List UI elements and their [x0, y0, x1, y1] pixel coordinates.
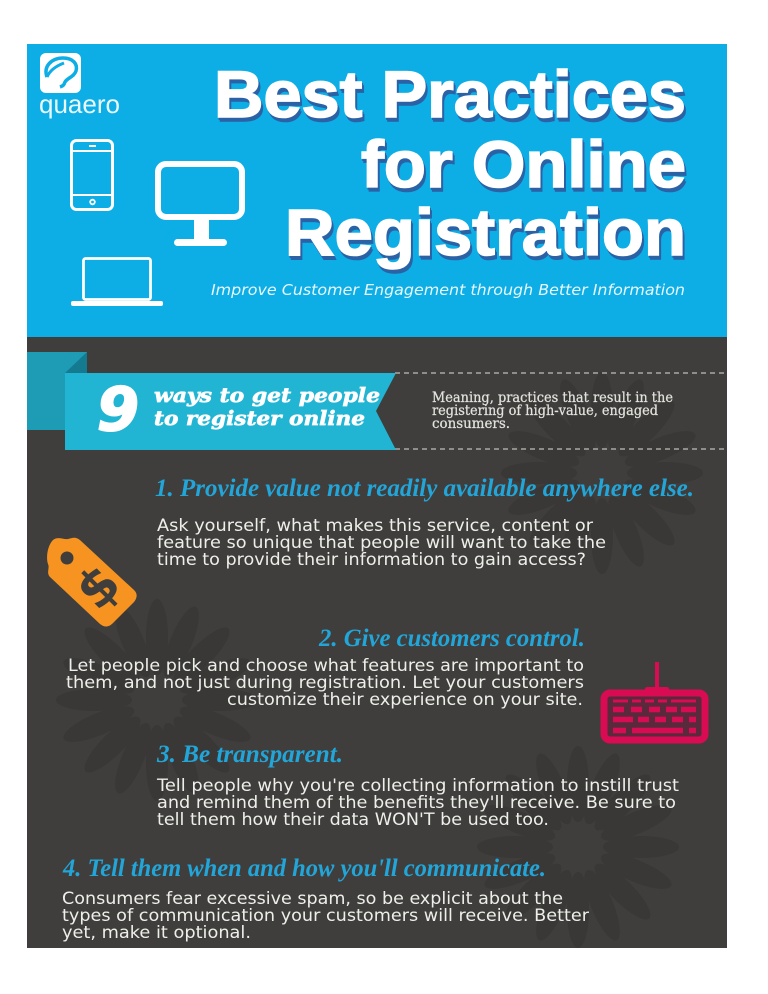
section 3: and remind them of the benefits they'll receive. Be sure to — [157, 793, 676, 812]
section 3: Tell people why you're collecting information to instill trust — [156, 776, 680, 795]
section 1 — [155, 475, 694, 569]
logo: quaero: quaero — [39, 89, 120, 119]
title: Registration — [285, 195, 686, 269]
section 4: 4. Tell them when and how you'll communicate. — [62, 855, 546, 882]
icon: desktop monitor — [158, 164, 242, 246]
dashed rules — [395, 373, 727, 449]
text: banner description: Meaning, practices that result in the — [432, 390, 673, 406]
section 2: Let people pick and choose what features are important to — [68, 656, 584, 675]
logo: quaero — [39, 53, 120, 119]
section 4: Consumers fear excessive spam, so be explicit about the — [62, 889, 563, 908]
text: banner description — [432, 390, 673, 432]
title: Best Practices — [214, 57, 686, 131]
background flowers — [47, 542, 136, 602]
title: for Online — [361, 127, 686, 201]
icon: orange price tag: $ — [65, 554, 133, 622]
panel: blue header — [27, 44, 727, 337]
panel: dark content background — [27, 337, 727, 948]
section 1: 1. Provide value not readily available anywhere else. — [155, 475, 694, 502]
text: banner description: registering of high-value, engaged — [432, 403, 658, 419]
section 3: tell them how their data WON'T be used too. — [157, 810, 549, 829]
section 3 — [156, 741, 680, 829]
section 2: 2. Give customers control. — [318, 625, 585, 652]
icon: crimson keyboard — [604, 662, 705, 740]
section 2: them, and not just during registration. Let your customers — [66, 673, 584, 692]
banner: 9 ways: ways to get people — [154, 383, 380, 407]
section 1: Ask yourself, what makes this service, content or — [157, 516, 593, 535]
section 1: feature so unique that people will want to take the — [157, 533, 606, 552]
section 2 — [66, 625, 585, 709]
icon: laptop — [71, 258, 163, 306]
section 4: types of communication your customers will receive. Better — [62, 906, 589, 925]
icon: orange price tag — [47, 538, 137, 626]
section 1: time to provide their information to gain access? — [157, 550, 586, 569]
subtitle: Improve Customer Engagement through Better Information — [211, 281, 685, 299]
section 3: 3. Be transparent. — [156, 741, 343, 768]
title — [214, 57, 686, 269]
text: banner description: consumers. — [432, 416, 510, 432]
banner: 9 ways — [27, 352, 396, 450]
section 4 — [62, 855, 589, 942]
banner: 9 ways: 9 — [97, 375, 139, 445]
section 2: customize their experience on your site. — [227, 690, 583, 709]
icon: smartphone — [72, 140, 112, 210]
banner: 9 ways: to register online — [154, 406, 365, 430]
section 4: yet, make it optional. — [62, 923, 251, 942]
